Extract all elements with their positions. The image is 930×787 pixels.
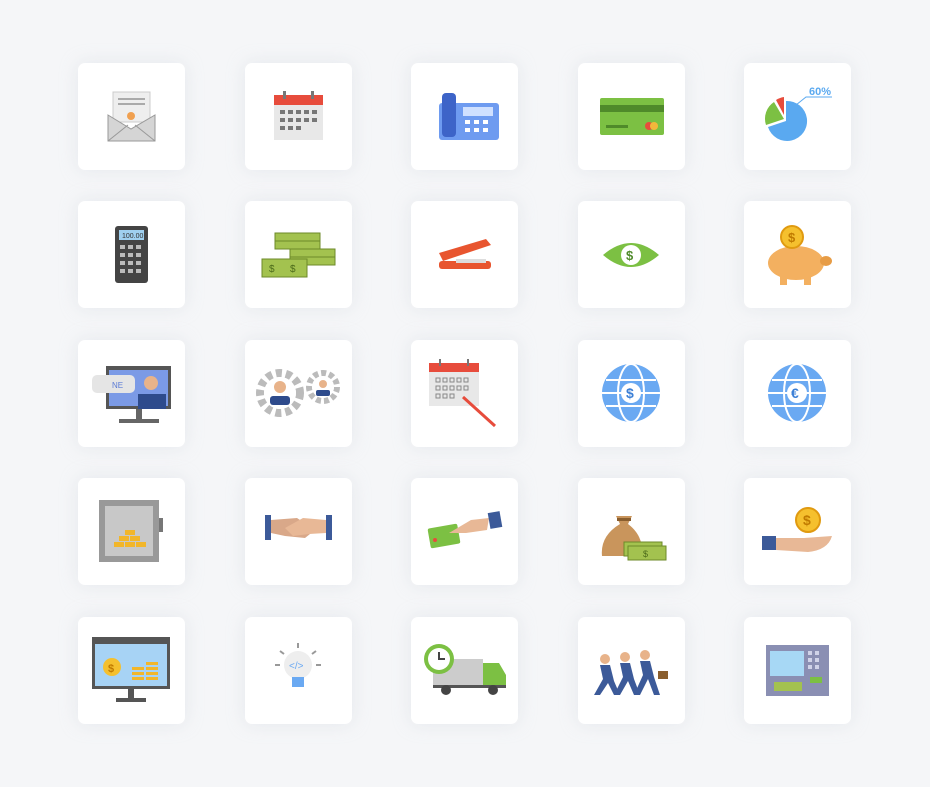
card: truck with clock [411, 617, 518, 724]
card: hand with coin [744, 478, 851, 585]
card: monitor with presenter [78, 340, 185, 447]
card: ATM [744, 617, 851, 724]
card: calculator: 100.00 [122, 233, 144, 240]
card: money bag [578, 478, 685, 585]
card: credit card [578, 63, 685, 170]
card: money stacks: $ [290, 264, 296, 275]
card: globe euro: € [791, 385, 799, 401]
card: globe dollar: $ [626, 385, 634, 401]
card: globe euro [744, 340, 851, 447]
card: globe dollar [578, 340, 685, 447]
card: handshake [245, 478, 352, 585]
card: monitor with coins [78, 617, 185, 724]
card: monitor with presenter: NE [112, 381, 123, 390]
card: hand with coin: $ [803, 512, 811, 528]
card: money stacks [245, 201, 352, 308]
card: telephone [411, 63, 518, 170]
card: walking businessmen [578, 617, 685, 724]
card: hand with card [411, 478, 518, 585]
card: gears people [245, 340, 352, 447]
card: piggy bank: $ [788, 230, 796, 245]
card: safe [78, 478, 185, 585]
card: calendar with pen [411, 340, 518, 447]
card: pie chart: 60% [809, 86, 831, 98]
card: piggy bank [744, 201, 851, 308]
card: eye: $ [626, 248, 634, 263]
card: monitor with coins: $ [108, 663, 114, 675]
card: calendar [245, 63, 352, 170]
card: money stacks: $ [269, 264, 275, 275]
card: stapler [411, 201, 518, 308]
card: pie chart [744, 63, 851, 170]
card: eye [578, 201, 685, 308]
card: light bulb [245, 617, 352, 724]
card: money bag: $ [643, 549, 648, 559]
card: calculator [78, 201, 185, 308]
card: envelope [78, 63, 185, 170]
card: light bulb: </> [289, 661, 304, 672]
